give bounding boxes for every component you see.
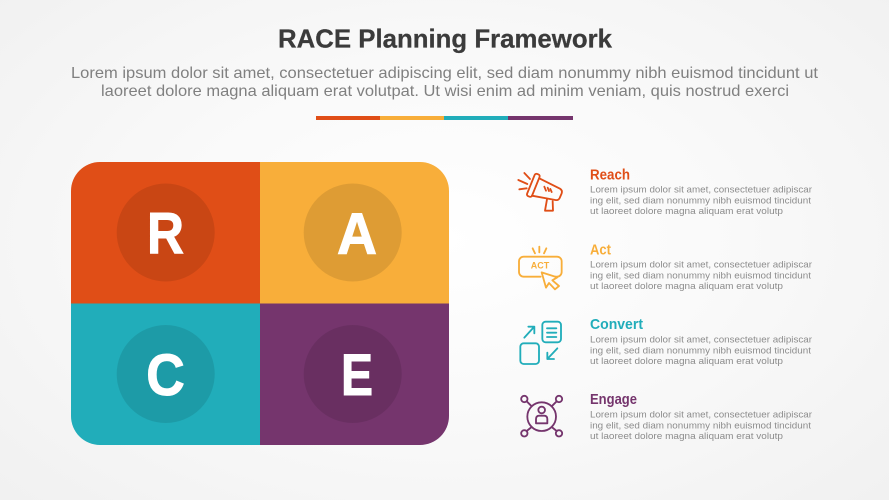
subtitle text: Lorem ipsum dolor sit amet, consectetuer adipiscing elit, sed diam nonummy nibh euismod tincidunt ut — [71, 65, 819, 82]
circle: R — [117, 184, 215, 282]
icon: engage network — [521, 396, 562, 436]
text block: Engage: Engage — [590, 391, 637, 408]
panel: RACE quadrant grid — [71, 162, 449, 445]
text block: Reach: Reach — [590, 166, 630, 183]
text block: Act: ut laoreet dolore magna aliquam erat volutp — [590, 281, 783, 292]
icon: act button: ACT — [531, 260, 550, 270]
title: RACE Planning Framework — [278, 24, 613, 54]
text block: Engage: Lorem ipsum dolor sit amet, consectetuer adipiscar — [590, 410, 812, 421]
text block: Act: ing elit, sed diam nonummy nibh euismod tincidunt — [590, 270, 811, 281]
circle: R: R — [147, 202, 184, 266]
text block: Act: Lorem ipsum dolor sit amet, consectetuer adipiscar — [590, 260, 812, 271]
colour divider bar — [316, 116, 573, 120]
circle: E: E — [341, 343, 373, 408]
quadrant: A — [260, 162, 449, 304]
text block: Reach: ing elit, sed diam nonummy nibh euismod tincidunt — [590, 195, 811, 206]
text block: Reach: Lorem ipsum dolor sit amet, consectetuer adipiscar — [590, 185, 812, 196]
quadrant: E — [260, 304, 449, 445]
text block: Act — [590, 241, 812, 292]
circle: A: A — [337, 202, 377, 267]
icon: megaphone — [518, 173, 562, 211]
text block: Reach: ut laoreet dolore magna aliquam erat volutp — [590, 206, 783, 217]
text block: Engage: ut laoreet dolore magna aliquam erat volutp — [590, 431, 783, 442]
text block: Convert: Convert — [590, 316, 643, 333]
icon: act button — [519, 247, 562, 289]
text block: Convert: ing elit, sed diam nonummy nibh euismod tincidunt — [590, 345, 811, 356]
quadrant: C — [71, 304, 260, 445]
subtitle text — [71, 65, 819, 100]
text block: Engage — [590, 391, 812, 442]
text block: Convert: Lorem ipsum dolor sit amet, consectetuer adipiscar — [590, 335, 812, 346]
quadrant: R — [71, 162, 260, 304]
circle: A — [304, 184, 402, 282]
text block: Act: Act — [590, 241, 611, 258]
circle: E — [304, 325, 402, 423]
text block: Reach — [590, 166, 812, 217]
icon: convert — [520, 322, 561, 364]
subtitle text: laoreet dolore magna aliquam erat volutpat. Ut wisi enim ad minim veniam, quis nostrud exerci — [101, 83, 789, 100]
text block: Engage: ing elit, sed diam nonummy nibh euismod tincidunt — [590, 420, 811, 431]
text block: Convert: ut laoreet dolore magna aliquam erat volutp — [590, 356, 783, 367]
circle: C — [117, 325, 215, 423]
circle: C: C — [146, 343, 185, 408]
text block: Convert — [590, 316, 812, 367]
